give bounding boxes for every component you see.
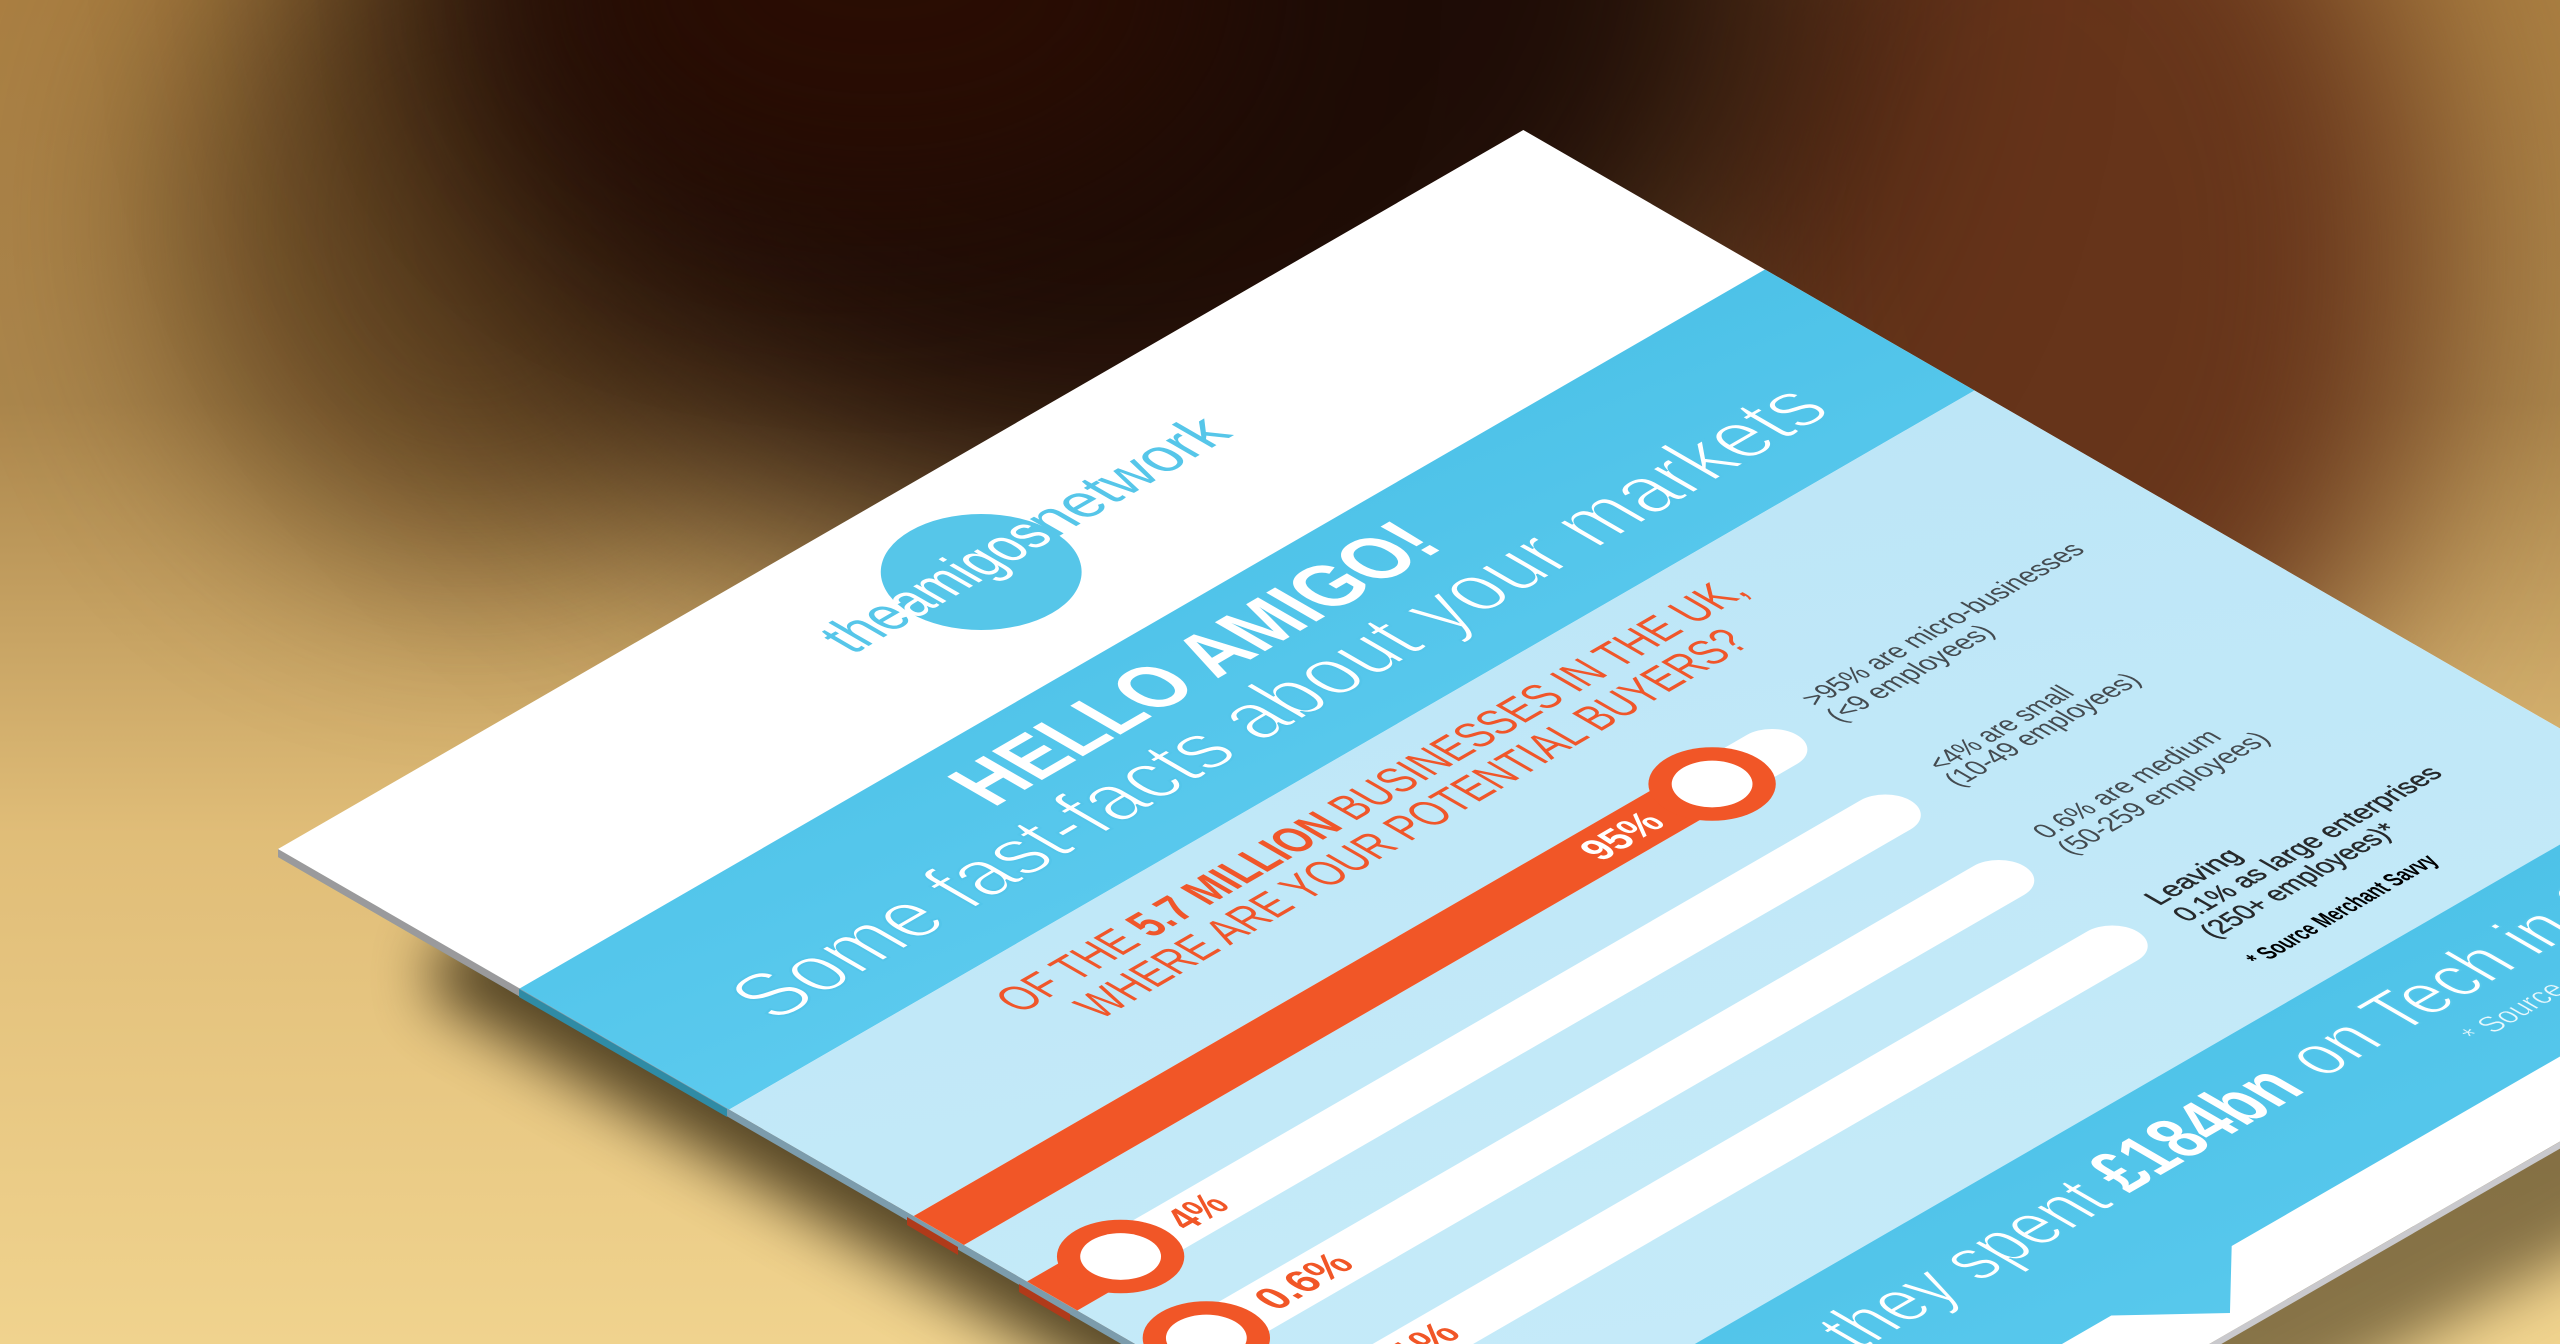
bar: small 4%: 4% xyxy=(1154,1187,1240,1237)
bar: micro-businesses 95% xyxy=(914,729,1808,1245)
bar chart: business size share xyxy=(914,729,2148,1344)
subheading: fast facts: Some fast-facts about your markets xyxy=(707,371,1852,1033)
bar: medium 0.6%: 0.6% xyxy=(1243,1246,1365,1317)
banner statement: tech spend xyxy=(1793,814,2560,1344)
bar: medium 0.6% xyxy=(1142,860,2034,1344)
light blue chart section xyxy=(729,390,2560,1344)
logo: the amigos network: amigos xyxy=(865,509,1068,626)
bar: micro-businesses 95%: 95% xyxy=(1568,805,1675,867)
logo: the amigos network xyxy=(774,389,1298,692)
label: large enterprises: (250+ employees)* xyxy=(2193,819,2407,943)
page thickness edge xyxy=(278,849,2560,1344)
label: small: (10-49 employees) xyxy=(1937,669,2149,791)
bottom blue banner with pointer xyxy=(1415,786,2560,1344)
label: large enterprises: 0.1% as large enterprises xyxy=(2166,762,2450,926)
label: small: <4% are small xyxy=(1920,681,2082,775)
heading: hello amigo: HELLO AMIGO! xyxy=(927,509,1461,817)
label: large enterprises: Leaving xyxy=(2137,844,2250,910)
chart question heading: WHERE ARE YOUR POTENTIAL BUYERS? xyxy=(1062,621,1761,1026)
logo: the amigos network: network xyxy=(1005,406,1247,545)
bar: small 4% xyxy=(1027,794,1921,1310)
chart question heading: OF THE 5.7 MILLION BUSINESSES IN THE UK, xyxy=(982,570,1760,1020)
page shadow: left edge xyxy=(430,700,1700,1344)
page shadow: lower right edge xyxy=(1700,700,2560,1344)
banner statement: tech spend: £184bn xyxy=(2066,1054,2322,1202)
label: micro-businesses: >95% are micro-businesses xyxy=(1794,538,2092,711)
source note: merchant savvy: * Source Merchant Savvy xyxy=(2239,850,2445,969)
label: medium: (50-259 employees) xyxy=(2050,727,2278,859)
label: micro-businesses: (<9 employees) xyxy=(1819,620,2002,727)
blue header band xyxy=(520,270,1974,1110)
label: medium: 0.6% are medium xyxy=(2026,725,2229,843)
bar: large 0.1% xyxy=(1372,926,2148,1344)
logo: the amigos network: the xyxy=(803,590,928,662)
